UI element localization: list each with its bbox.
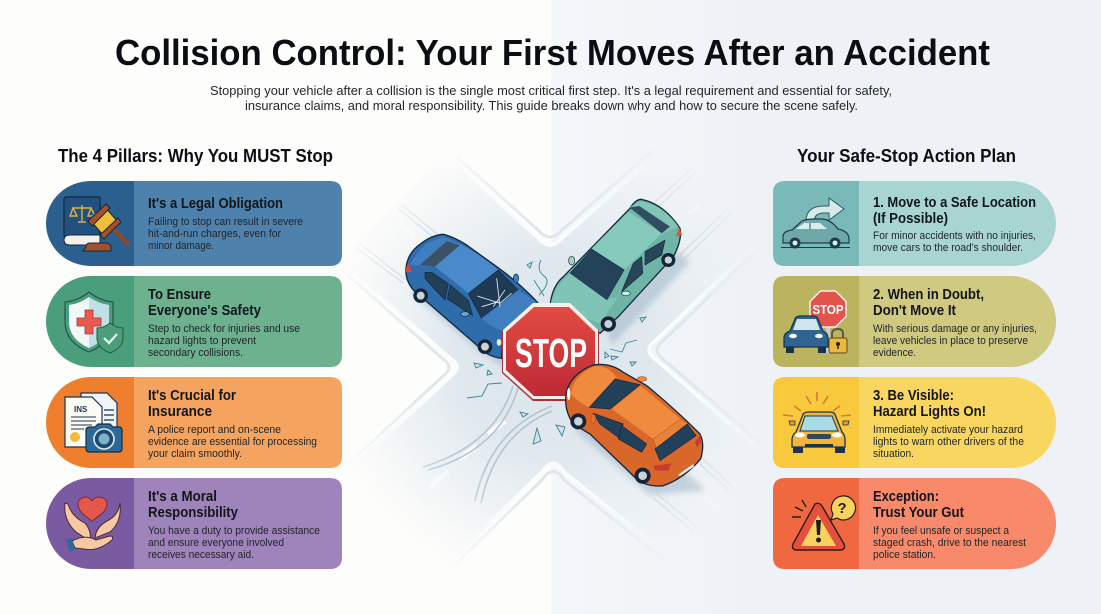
title: Collision Control: Your First Moves After an Accident — [115, 32, 990, 73]
description: move cars to the road's shoulder. — [873, 242, 1023, 254]
stop sign: STOP — [515, 330, 587, 376]
icon: car, stop sign and lock — [784, 291, 847, 353]
description: hazard lights to prevent — [148, 335, 256, 347]
description — [148, 424, 317, 460]
icon: documents and camera — [65, 393, 122, 452]
heading: action plan: Your Safe-Stop Action Plan — [797, 146, 1016, 166]
road intersection — [356, 164, 730, 550]
icon: documents and camera: INS — [74, 405, 88, 414]
description: secondary collisions. — [148, 347, 243, 359]
description: You have a duty to provide assistance — [148, 525, 320, 537]
intro text — [210, 83, 892, 113]
description: A police report and on-scene — [148, 424, 281, 436]
icon: car and arrow — [781, 198, 850, 248]
icon: warning triangle with question bubble — [792, 496, 855, 550]
description — [148, 525, 320, 561]
description: With serious damage or any injuries, — [873, 323, 1037, 335]
icon: safety shield — [65, 292, 123, 353]
car shadows — [410, 250, 705, 495]
description: and ensure everyone involved — [148, 537, 284, 549]
icon: law book and gavel — [64, 197, 128, 251]
description: police station. — [873, 549, 936, 561]
heading: 2. When in Doubt, — [873, 287, 984, 303]
description — [873, 230, 1036, 254]
car: orange — [566, 364, 703, 486]
description: hit-and-run charges, even for — [148, 228, 281, 240]
description — [873, 323, 1037, 359]
description — [873, 525, 1026, 561]
heading — [873, 195, 1036, 227]
description: For minor accidents with no injuries, — [873, 230, 1036, 242]
description: your claim smoothly. — [148, 448, 242, 460]
description — [148, 216, 303, 252]
heading: It's a Legal Obligation — [148, 196, 283, 212]
description: leave vehicles in place to preserve — [873, 335, 1028, 347]
heading: (If Possible) — [873, 211, 948, 227]
description: receives necessary aid. — [148, 549, 254, 561]
heading — [148, 388, 236, 420]
heading: Hazard Lights On! — [873, 404, 986, 420]
panel: pillar 3 insurance — [46, 377, 342, 468]
heading — [873, 287, 984, 319]
debris and cracks — [467, 260, 646, 444]
heading: Don't Move It — [873, 303, 956, 319]
heading — [873, 489, 964, 521]
panel: pillar 1 legal obligation — [46, 181, 342, 266]
description: situation. — [873, 448, 914, 460]
panel: step 1 move — [773, 181, 1056, 266]
description: minor damage. — [148, 240, 214, 252]
description — [148, 323, 300, 359]
car: teal — [550, 199, 682, 333]
description: If you feel unsafe or suspect a — [873, 525, 1009, 537]
icon: car, stop sign and lock: STOP — [812, 302, 844, 317]
heading: To Ensure — [148, 287, 211, 303]
stop sign — [502, 303, 599, 401]
car: blue — [406, 234, 538, 358]
heading: the 4 pillars: The 4 Pillars: Why You MUST Stop — [58, 146, 333, 166]
icon: warning triangle with question bubble: ? — [838, 500, 847, 517]
central crash illustration — [356, 164, 730, 550]
description: Step to check for injuries and use — [148, 323, 300, 335]
description: Failing to stop can result in severe — [148, 216, 303, 228]
description — [873, 424, 1024, 460]
heading: Everyone's Safety — [148, 303, 261, 319]
description: staged crash, drive to the nearest — [873, 537, 1026, 549]
description: evidence are essential for processing — [148, 436, 317, 448]
panel: pillar 4 moral — [46, 478, 342, 569]
heading — [148, 287, 261, 319]
heading — [873, 388, 986, 420]
description: lights to warn other drivers of the — [873, 436, 1024, 448]
intro text: Stopping your vehicle after a collision is the single most critical first step. It's a legal requirement and essential for safety, — [210, 83, 892, 98]
panel: step 2 don't move — [773, 276, 1056, 367]
heading: Trust Your Gut — [873, 505, 964, 521]
heading: It's a Moral — [148, 489, 217, 505]
panel: step 3 hazard lights — [773, 377, 1056, 468]
heading: Responsibility — [148, 505, 238, 521]
icon: heart in hands — [65, 497, 120, 552]
heading: Exception: — [873, 489, 939, 505]
description: Immediately activate your hazard — [873, 424, 1023, 436]
icon: car with hazard lights — [783, 392, 851, 453]
panel: exception — [773, 478, 1056, 569]
heading: It's Crucial for — [148, 388, 236, 404]
heading — [148, 489, 238, 521]
heading: 3. Be Visible: — [873, 388, 954, 404]
heading: Insurance — [148, 404, 212, 420]
heading: 1. Move to a Safe Location — [873, 195, 1036, 211]
intro text: insurance claims, and moral responsibility. This guide breaks down why and how to secure the scene safely. — [245, 98, 858, 113]
description: evidence. — [873, 347, 916, 359]
panel: pillar 2 safety — [46, 276, 342, 367]
